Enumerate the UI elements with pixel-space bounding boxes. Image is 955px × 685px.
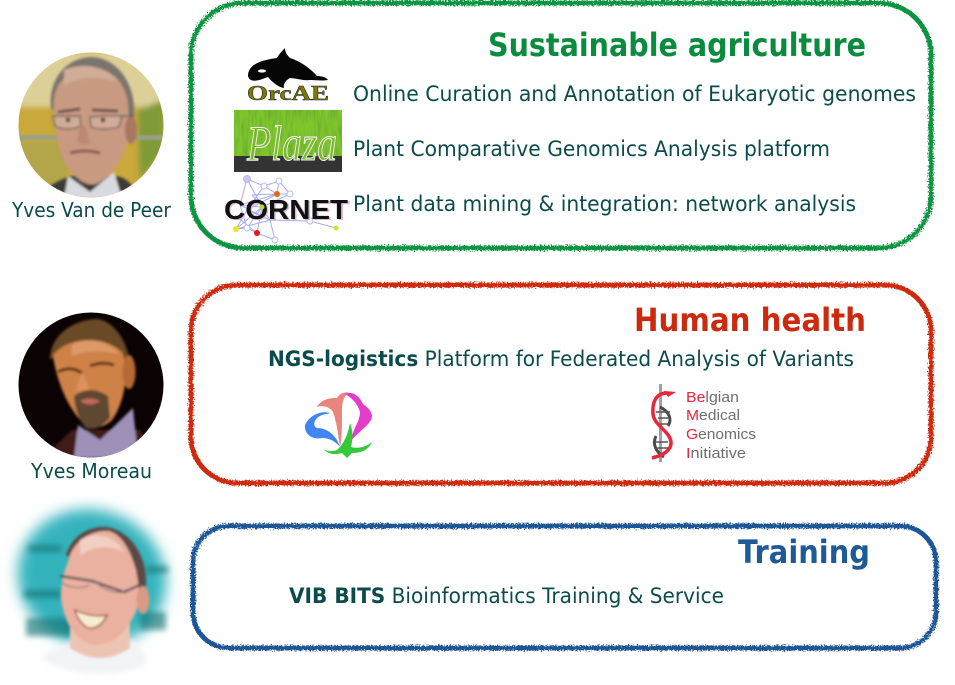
text: CORNET description: Plant data mining & integration: network analysis bbox=[353, 192, 856, 216]
text: Plaza description: Plant Comparative Genomics Analysis platform bbox=[353, 137, 830, 161]
icon: CORNET logo: CORNET bbox=[224, 194, 348, 225]
text: Medical: Medical bbox=[686, 407, 740, 424]
text: NGS-logistics: NGS-logistics Platform for Federated Analysis of Variants bbox=[268, 347, 854, 371]
icon: Belgian Medical Genomics Initiative logo bbox=[652, 384, 756, 462]
text: OrcAE description: Online Curation and Annotation of Eukaryotic genomes bbox=[353, 82, 916, 106]
portrait: training lead bbox=[0, 488, 186, 674]
panel: human health bbox=[191, 285, 931, 483]
heading: human health: Human health bbox=[634, 301, 866, 339]
heading: training: Training bbox=[738, 533, 870, 571]
label: Yves Moreau: Yves Moreau bbox=[30, 459, 152, 483]
text: Belgian: Belgian bbox=[686, 389, 739, 406]
icon: NGS-logistics flower logo bbox=[305, 392, 372, 458]
icon: CORNET logo: CORNET bbox=[225, 195, 350, 226]
text: Initiative: Initiative bbox=[686, 445, 746, 462]
portrait: Yves Van de Peer bbox=[18, 52, 164, 198]
text: VIB BITS: VIB BITS Bioinformatics Training & Service bbox=[289, 584, 724, 608]
heading: sustainable agriculture: Sustainable agriculture bbox=[488, 26, 866, 64]
icon: Plaza logo: Plaza bbox=[246, 115, 337, 171]
label: Yves Van de Peer: Yves Van de Peer bbox=[11, 198, 172, 222]
text: Genomics: Genomics bbox=[686, 426, 756, 443]
panel: sustainable agriculture bbox=[191, 3, 931, 248]
portrait: Yves Moreau bbox=[18, 312, 164, 458]
panel: training bbox=[193, 526, 936, 648]
icon: OrcAE logo: OrcAE bbox=[247, 81, 329, 105]
icon: Plaza logo bbox=[234, 110, 342, 172]
icon: OrcAE logo bbox=[247, 48, 329, 105]
icon: CORNET logo bbox=[224, 176, 350, 243]
